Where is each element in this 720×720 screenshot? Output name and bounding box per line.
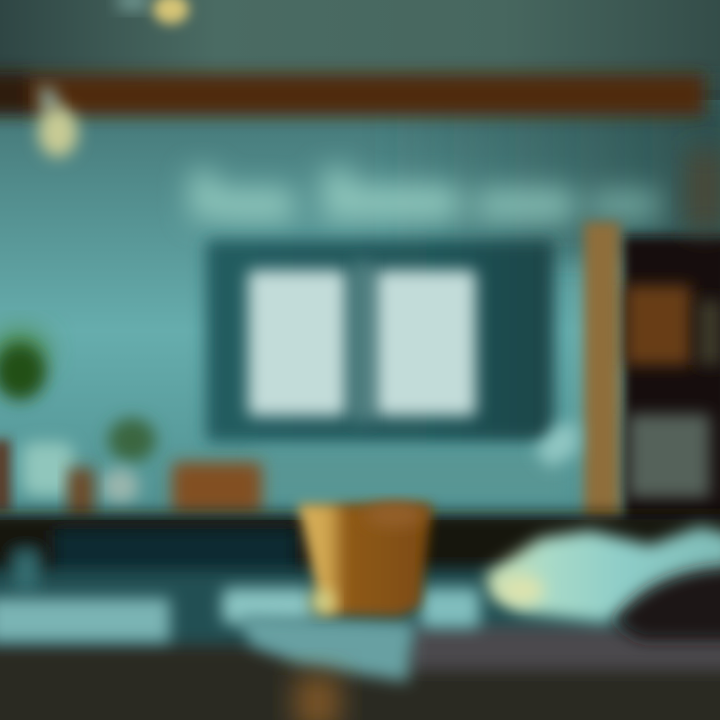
right page bbox=[376, 270, 476, 416]
plants and desk objects on left bbox=[0, 330, 262, 518]
bookshelf bbox=[534, 150, 720, 526]
lower wall band bbox=[255, 452, 565, 498]
pendant lamps bbox=[38, 0, 189, 157]
panel: dark teal board bbox=[206, 240, 554, 442]
open book on right bbox=[486, 526, 720, 640]
heading: blurred title on wall bbox=[190, 168, 660, 222]
foreground papers bbox=[0, 588, 480, 720]
shelf books bbox=[625, 285, 691, 365]
wooden ceiling beam bbox=[0, 72, 705, 116]
desk surface bbox=[0, 514, 720, 720]
golden cup bbox=[298, 503, 432, 616]
left page bbox=[248, 270, 346, 416]
